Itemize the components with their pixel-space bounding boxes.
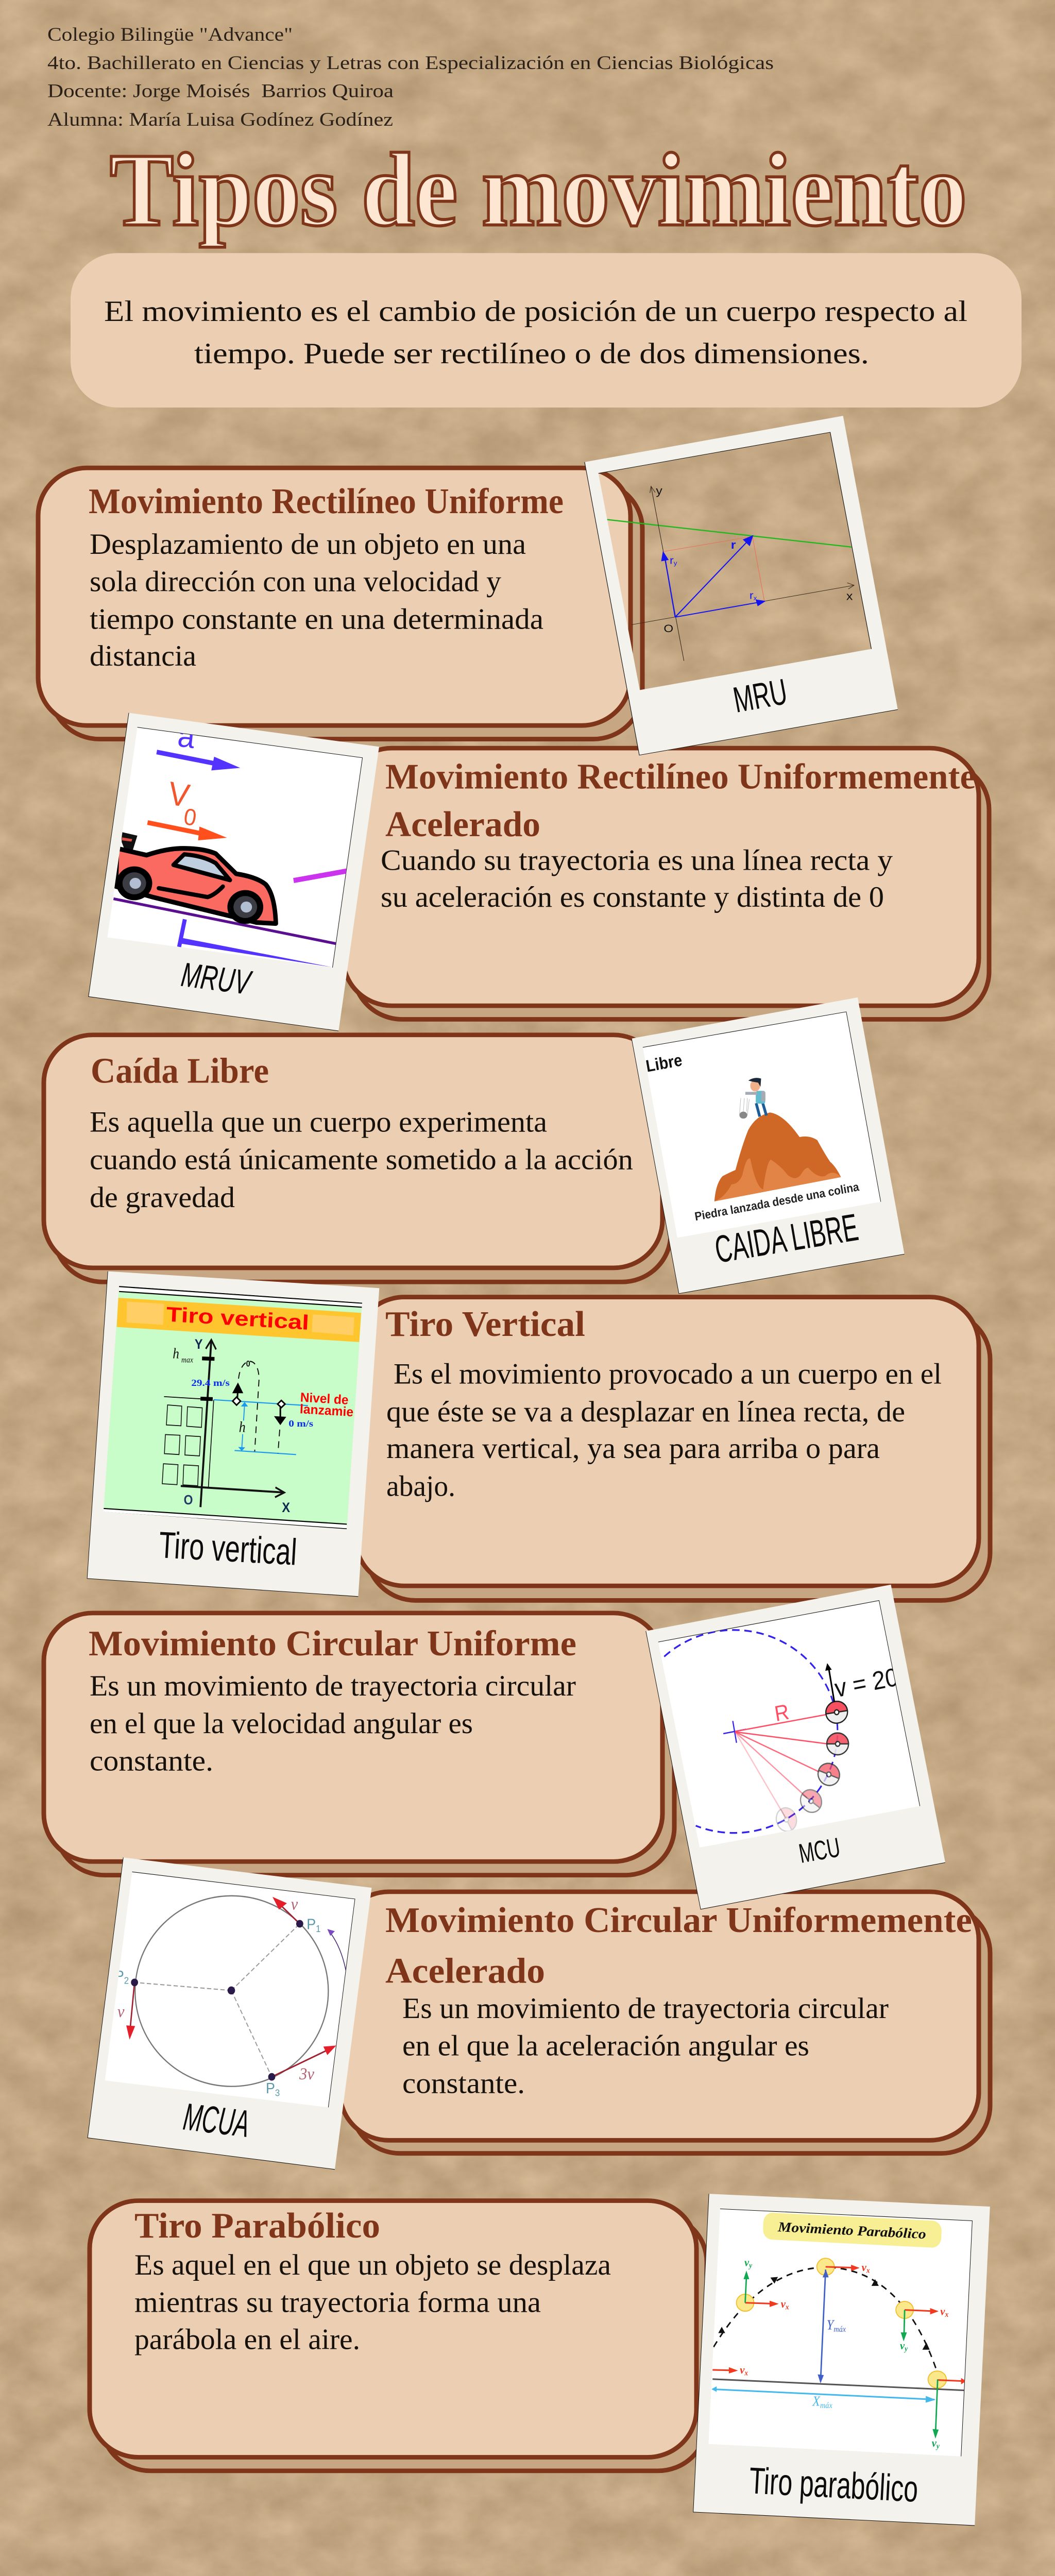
text block: tiro parabolico: Es aquel en el que un objeto se desplaza [134, 2249, 611, 2281]
polaroid: movimiento parabolico diagram: x [866, 2266, 870, 2275]
panel: movimiento circular uniformemente acelerado [340, 1892, 990, 2154]
polaroid: tiro vertical diagram: 0 m/s [288, 1418, 313, 1429]
polaroid: MCUA circular motion diagram: 3 [275, 2088, 280, 2098]
polaroid: MRUV car diagram [89, 713, 379, 1031]
label: MRU: MRU [730, 672, 790, 721]
polaroid: tiro vertical diagram: lanzamie [299, 1402, 354, 1420]
text block: tiro parabolico [134, 2249, 611, 2355]
text block: tiro vertical: que éste se va a desplazar en línea recta, de [386, 1396, 905, 1428]
text block: caida libre: cuando está únicamente sometido a la acción [90, 1144, 633, 1176]
text block: caida libre: Es aquella que un cuerpo experimenta [90, 1106, 547, 1138]
panel: tiro vertical [355, 1297, 990, 1600]
panel: introduction [71, 253, 1022, 408]
heading: caida libre: Caída Libre [91, 1051, 269, 1091]
polaroid: MRUV car diagram: a [176, 718, 197, 755]
label: Tiro vertical: Tiro vertical [158, 1524, 298, 1573]
polaroid: movimiento parabolico diagram: Movimiento Parabólico [777, 2219, 926, 2242]
polaroid: tiro vertical diagram: Nivel de [300, 1390, 349, 1408]
polaroid: movimiento parabolico diagram: x [744, 2369, 748, 2378]
polaroid: MRU vector diagram: y [674, 560, 677, 567]
polaroid: movimiento parabolico diagram: máx [820, 2401, 832, 2410]
heading: MCUA: Movimiento Circular Uniformemente [385, 1901, 972, 1940]
polaroid: MCUA circular motion diagram: P [266, 2080, 275, 2096]
polaroid: movimiento parabolico diagram: X [812, 2394, 820, 2409]
text block: MRU: distancia [90, 640, 196, 672]
text block: caida libre: de gravedad [90, 1181, 235, 1214]
label: MRUV: MRUV [179, 956, 254, 1003]
polaroid: MRU vector diagram [585, 416, 898, 755]
text block: MCU: en el que la velocidad angular es [90, 1708, 473, 1740]
text block: MRU: Desplazamiento de un objeto en una [90, 529, 526, 561]
polaroid: tiro vertical diagram: Y [195, 1337, 203, 1352]
label: MCU: MCU [796, 1833, 843, 1869]
header: school and student details: Alumna: María Luisa Godínez Godínez [47, 110, 393, 130]
text block: MCUA [402, 1993, 889, 2099]
label: Tiro parabolico: Tiro parabólico [748, 2460, 919, 2510]
panel: movimiento circular uniforme [44, 1613, 674, 1875]
polaroid: movimiento parabolico diagram: v [862, 2261, 866, 2274]
text block: tiro vertical: Es el movimiento provocado a un cuerpo en el [394, 1358, 942, 1390]
icon: pokeball positions [772, 1700, 849, 1836]
polaroid: movimiento parabolico diagram [693, 2194, 990, 2526]
polaroid: MCUA circular motion diagram: 2 [124, 1975, 129, 1986]
polaroid: MCUA circular motion diagram: 3v [299, 2064, 315, 2083]
polaroid: MCU circular motion diagram [646, 1585, 945, 1909]
title: Tipos de movimiento [110, 132, 967, 248]
polaroid: caida libre hill illustration: Piedra lanzada desde una colina [693, 1180, 860, 1223]
heading: tiro vertical: Tiro Vertical [385, 1304, 585, 1344]
polaroid: MRUV car diagram: 0 [182, 804, 198, 831]
heading: tiro parabolico: Tiro Parabólico [134, 2206, 380, 2246]
polaroid: MCUA circular motion diagram: v [117, 2002, 125, 2021]
heading: MCU: Movimiento Circular Uniforme [89, 1624, 576, 1664]
polaroid: tiro vertical diagram: h [173, 1345, 179, 1362]
polaroid: movimiento parabolico diagram: v [932, 2436, 937, 2449]
text block: tiro vertical: abajo. [386, 1470, 455, 1502]
text block: MCU [90, 1670, 576, 1777]
polaroid: MRU vector diagram: x [754, 595, 757, 602]
polaroid: MRU vector diagram: r [731, 539, 736, 552]
polaroid: tiro vertical diagram: h [239, 1419, 246, 1436]
text block: MRUV: su aceleración es constante y distinta de 0 [381, 881, 884, 913]
polaroid: MRU vector diagram: O [663, 622, 673, 635]
text block: MRU [90, 529, 543, 672]
polaroid: movimiento parabolico diagram: máx [833, 2325, 846, 2334]
polaroid: movimiento parabolico diagram: y [935, 2442, 940, 2451]
polaroid: movimiento parabolico diagram: y [748, 2261, 753, 2270]
polaroid: MCUA circular motion diagram: P [307, 1916, 316, 1932]
panel: caida libre [44, 1035, 671, 1282]
polaroid: tiro vertical diagram: 0 [246, 1360, 250, 1369]
polaroid: movimiento parabolico diagram: v [940, 2305, 945, 2318]
polaroid: tiro vertical diagram: Tiro vertical [166, 1302, 310, 1334]
panel: introduction: El movimiento es el cambio de posición de un cuerpo respecto al [104, 296, 967, 328]
header: school and student details: 4to. Bachillerato en Ciencias y Letras con Especialización en Ciencias Biológicas [47, 53, 774, 74]
text block: MRUV: Cuando su trayectoria es una línea recta y [381, 844, 893, 876]
polaroid: MCUA circular motion diagram [88, 1857, 372, 2170]
polaroid: tiro vertical diagram: O [184, 1493, 193, 1507]
polaroid: MCUA circular motion diagram: 1 [316, 1923, 320, 1934]
header: school and student details: Docente: Jorge Moisés Barrios Quiroa [47, 81, 394, 101]
text block: MCUA: Es un movimiento de trayectoria circular [402, 1993, 889, 2025]
text block: MCUA: constante. [402, 2067, 525, 2099]
heading: MRUV: Movimiento Rectilíneo Uniformemente [385, 757, 976, 796]
text block: tiro parabolico: parábola en el aire. [134, 2324, 360, 2355]
text block: MCU: constante. [90, 1745, 213, 1777]
text block: tiro vertical: manera vertical, ya sea para arriba o para [386, 1433, 880, 1465]
polaroid: MCU circular motion diagram: v = 20 [833, 1663, 900, 1703]
text block: tiro parabolico: mientras su trayectoria forma una [134, 2286, 541, 2318]
polaroid: MRUV car diagram: V [166, 775, 192, 815]
polaroid: movimiento parabolico diagram: v [781, 2297, 786, 2310]
panel: tiro parabolico [90, 2200, 707, 2471]
polaroid: movimiento parabolico diagram: x [785, 2303, 789, 2312]
polaroid: movimiento parabolico diagram: y [904, 2345, 908, 2353]
polaroid: movimiento parabolico diagram: Y [827, 2317, 833, 2333]
polaroid: movimiento parabolico diagram: x [945, 2310, 948, 2319]
heading: MRUV [385, 757, 976, 844]
polaroid: MCUA circular motion diagram: P [115, 1968, 124, 1984]
text block: tiro vertical [386, 1358, 942, 1502]
text block: MRUV [381, 844, 893, 913]
text block: MRU: sola dirección con una velocidad y [90, 566, 501, 598]
panel: movimiento rectilineo uniforme [38, 468, 642, 739]
header: school and student details [47, 24, 774, 130]
polaroid: MRU vector diagram: x [846, 590, 853, 603]
polaroid: tiro vertical diagram [87, 1272, 379, 1597]
polaroid: movimiento parabolico diagram: v [900, 2339, 905, 2352]
polaroid: movimiento parabolico diagram: v [744, 2256, 749, 2269]
label: CAIDA LIBRE: CAIDA LIBRE [712, 1206, 861, 1271]
heading: MCUA: Acelerado [385, 1951, 545, 1991]
polaroid: tiro vertical diagram: 29.4 m/s [191, 1378, 230, 1388]
polaroid: MCU circular motion diagram: R [773, 1699, 791, 1726]
polaroid: MRU vector diagram: r [670, 554, 674, 566]
text block: MRU: tiempo constante en una determinada [90, 603, 543, 636]
heading: MCUA [385, 1901, 972, 1991]
text block: MCU: Es un movimiento de trayectoria circular [90, 1670, 576, 1702]
polaroid: tiro vertical diagram: max [181, 1356, 193, 1365]
polaroid: caida libre hill illustration: Libre [644, 1050, 684, 1076]
text block: MCUA: en el que la aceleración angular es [402, 2030, 809, 2062]
polaroid: MCUA circular motion diagram: v [291, 1894, 298, 1913]
heading: MRUV: Acelerado [385, 805, 540, 844]
polaroid: MRU vector diagram: y [656, 485, 662, 497]
polaroid: caida libre hill illustration [632, 997, 905, 1294]
polaroid: movimiento parabolico diagram: v [740, 2363, 744, 2376]
polaroid: MRU vector diagram: r [750, 589, 754, 601]
panel: introduction: tiempo. Puede ser rectilíneo o de dos dimensiones. [194, 338, 869, 370]
text block: caida libre [90, 1106, 633, 1214]
panel: movimiento rectilineo uniformemente acelerado [343, 748, 989, 1020]
polaroid: tiro vertical diagram: X [282, 1500, 290, 1515]
header: school and student details: Colegio Bilingüe "Advance" [47, 24, 293, 45]
label: MCUA: MCUA [181, 2095, 252, 2145]
heading: MRU: Movimiento Rectilíneo Uniforme [89, 482, 564, 521]
